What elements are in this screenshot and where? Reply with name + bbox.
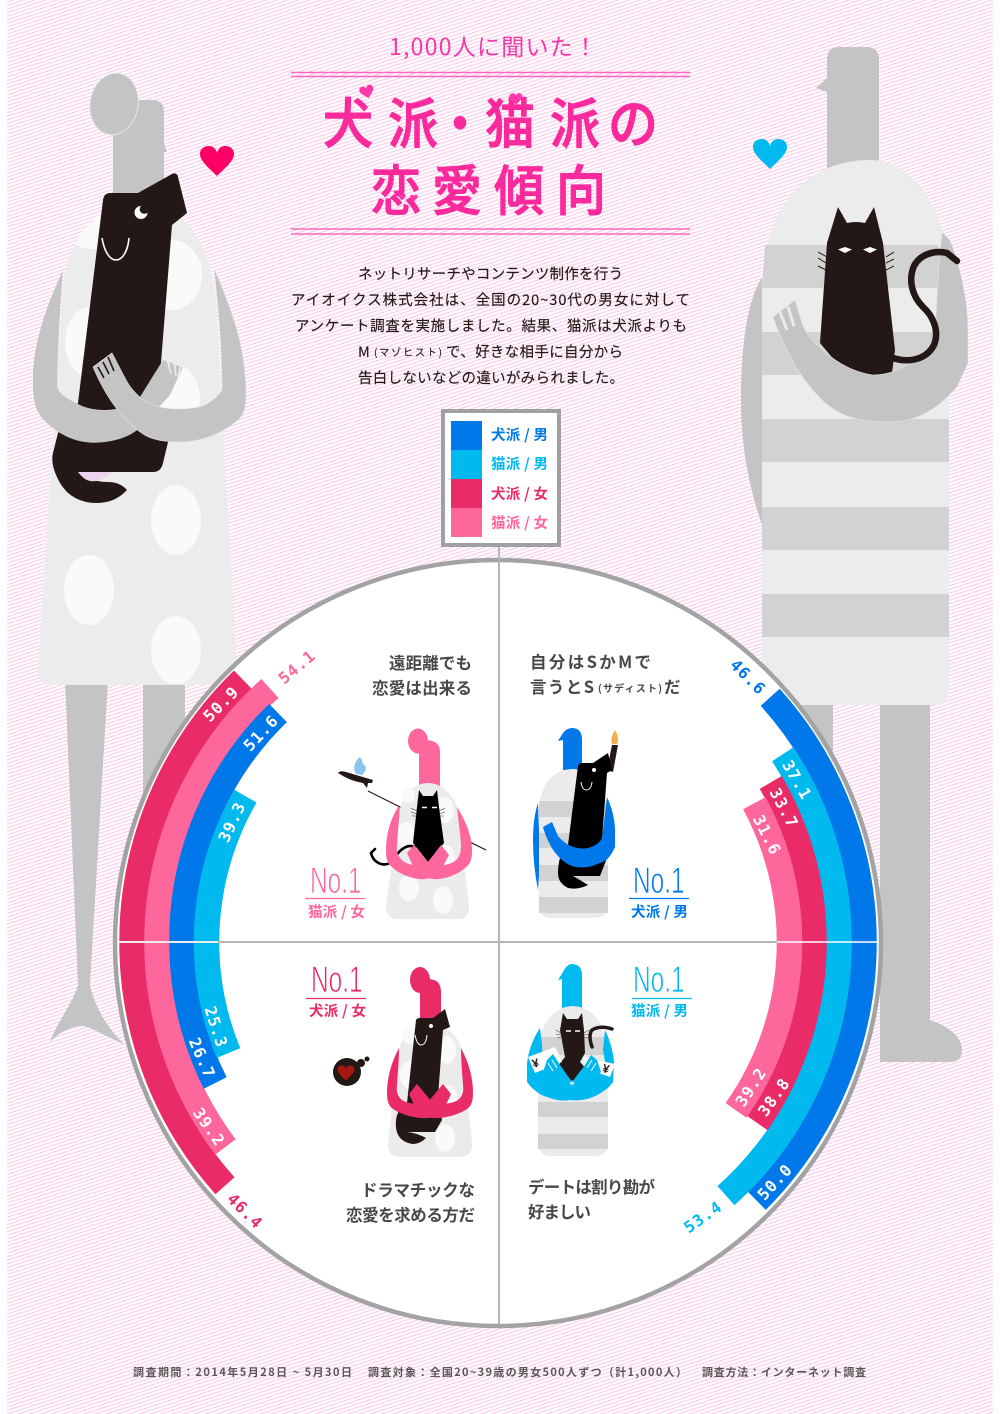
rank badge bbox=[305, 860, 365, 922]
heading bbox=[346, 1177, 475, 1226]
value labels: 46.4 bbox=[223, 1189, 267, 1233]
panel: dramatic love (bottom-left) bbox=[306, 959, 475, 1226]
intro text bbox=[291, 263, 690, 388]
value labels: 26.7 bbox=[185, 1035, 219, 1081]
subtitle: 1,000人に聞いた！ bbox=[389, 28, 597, 62]
rank badge: No.1 bbox=[310, 860, 362, 901]
hands bbox=[543, 1054, 601, 1086]
rank badge: No.1 bbox=[311, 959, 363, 1000]
rank badge bbox=[629, 860, 689, 922]
title rule bottom bbox=[291, 229, 690, 234]
icon: thought bubble heart bbox=[333, 1056, 370, 1086]
cat tail bbox=[893, 252, 957, 360]
dog eye bbox=[134, 206, 148, 219]
value labels: 38.8 bbox=[754, 1074, 794, 1120]
value labels: 53.4 bbox=[680, 1197, 726, 1237]
figure: man with cat bbox=[527, 964, 615, 1156]
rank badge: No.1 bbox=[633, 959, 685, 1000]
intro text: アイオイクス株式会社は、全国の20~30代の男女に対して bbox=[291, 289, 690, 310]
value labels: 39.3 bbox=[214, 799, 250, 845]
title: 恋愛傾向 bbox=[371, 162, 606, 222]
woman neck and hair bbox=[85, 69, 167, 215]
panel: S or M (top-right) bbox=[530, 649, 689, 922]
heading: (サディスト) bbox=[598, 680, 662, 695]
rank badge: 犬派 / 男 bbox=[631, 901, 688, 922]
woman dress with polka dots bbox=[38, 195, 237, 685]
heading: だ bbox=[664, 674, 680, 698]
illustration: woman with dog bbox=[33, 69, 246, 1045]
man neck and nose bbox=[816, 47, 879, 170]
intro text: 告白しないなどの違いがみられました。 bbox=[358, 367, 624, 388]
value labels: 51.6 bbox=[240, 711, 282, 755]
bill left bbox=[528, 1047, 562, 1073]
woman back arm bbox=[33, 270, 183, 443]
icon: airplane bbox=[338, 757, 373, 788]
heading: 恋愛は出来る bbox=[372, 675, 472, 699]
heading: デートは割り勘が bbox=[528, 1174, 656, 1198]
figure: man with dog bbox=[533, 728, 618, 918]
icon: pink heart bbox=[200, 146, 234, 176]
legend bbox=[443, 411, 559, 545]
rank badge: 猫派 / 男 bbox=[631, 1000, 688, 1021]
title: 犬派・猫派の bbox=[323, 95, 658, 155]
value labels: 46.6 bbox=[726, 655, 770, 699]
intro text: アンケート調査を実施しました。結果、猫派は犬派よりも bbox=[295, 315, 687, 336]
value labels: 31.6 bbox=[749, 812, 785, 858]
bill left: ¥ bbox=[531, 1056, 541, 1071]
main circle bbox=[115, 560, 881, 1326]
rank badge: 犬派 / 女 bbox=[309, 1000, 366, 1021]
title bbox=[323, 84, 658, 222]
rank badge: No.1 bbox=[633, 860, 685, 901]
legend label cat female: 猫派 / 女 bbox=[491, 512, 548, 533]
rank badge bbox=[631, 959, 692, 1021]
heading bbox=[528, 1174, 656, 1223]
cat whiskers bbox=[818, 252, 894, 270]
heading: 恋愛を求める方だ bbox=[346, 1202, 475, 1226]
footer note bbox=[133, 1364, 866, 1380]
dog body bbox=[52, 173, 187, 503]
heading bbox=[372, 650, 472, 699]
legend swatch cyan bbox=[451, 450, 482, 479]
legend label dog male: 犬派 / 男 bbox=[491, 424, 548, 445]
man front arm bbox=[773, 232, 968, 422]
title rule top bbox=[291, 72, 690, 76]
cat bbox=[818, 207, 895, 375]
panel: split the bill (bottom-right) bbox=[527, 959, 692, 1223]
chart: bottom-left arcs bbox=[132, 942, 228, 1186]
intro text: で、好きな相手に自分から bbox=[446, 341, 623, 362]
illustration: man with cat bbox=[741, 47, 968, 1062]
chart: top-left arcs bbox=[132, 680, 278, 942]
dog smile bbox=[102, 238, 129, 260]
value labels: 33.7 bbox=[766, 785, 802, 831]
value labels: 39.2 bbox=[189, 1104, 229, 1150]
value labels: 39.2 bbox=[731, 1064, 771, 1110]
icon: blue heart bbox=[753, 139, 787, 169]
title hearts bbox=[358, 84, 522, 201]
footer note: 調査対象：全国20~39歳の男女500人ずつ（計1,000人） bbox=[368, 1364, 687, 1380]
value labels: 25.3 bbox=[200, 1004, 232, 1050]
heading bbox=[530, 649, 680, 698]
intro text: (マゾヒスト) bbox=[374, 344, 442, 359]
value labels: 50.9 bbox=[199, 682, 243, 726]
value labels: 37.1 bbox=[778, 757, 816, 803]
heading: 遠距離でも bbox=[389, 650, 472, 674]
chart: top-right arcs bbox=[754, 697, 864, 942]
footer note: 調査期間：2014年5月28日 ~ 5月30日 bbox=[133, 1364, 352, 1380]
legend swatch blue bbox=[451, 421, 482, 450]
legend label cat male: 猫派 / 男 bbox=[491, 453, 548, 474]
rank badge: 猫派 / 女 bbox=[308, 901, 365, 922]
pink gap under tail bbox=[78, 472, 112, 481]
chart: bottom-right arcs bbox=[726, 942, 864, 1201]
heading: 自分はSかMで bbox=[530, 649, 651, 673]
value labels: 50.0 bbox=[754, 1160, 796, 1204]
legend label dog female: 犬派 / 女 bbox=[491, 483, 548, 504]
heading: 好ましい bbox=[528, 1199, 591, 1223]
value labels: 54.1 bbox=[275, 646, 319, 688]
cross dividers bbox=[117, 547, 878, 1325]
cat eyes bbox=[838, 247, 877, 253]
rank badge bbox=[306, 959, 366, 1021]
man striped shirt bbox=[762, 160, 949, 705]
intro text: M bbox=[358, 341, 370, 362]
footer note: 調査方法：インターネット調査 bbox=[702, 1364, 866, 1380]
bill right: ¥ bbox=[601, 1061, 611, 1077]
figure: woman with dog bbox=[387, 967, 473, 1157]
legend swatch pink bbox=[451, 508, 482, 537]
value labels bbox=[185, 646, 816, 1237]
heading: 言うとS bbox=[530, 674, 594, 698]
legend swatch dark pink bbox=[451, 479, 482, 508]
heading: ドラマチックな bbox=[361, 1177, 475, 1201]
intro text: ネットリサーチやコンテンツ制作を行う bbox=[358, 263, 623, 284]
panel: long distance (top-left) bbox=[305, 650, 486, 922]
woman legs bbox=[50, 680, 185, 1045]
man back arm bbox=[741, 277, 762, 525]
bill right bbox=[583, 1057, 615, 1077]
figure: woman with cat bbox=[371, 728, 472, 919]
man legs bbox=[790, 700, 962, 1062]
flight line bbox=[368, 791, 486, 850]
woman front arm bbox=[93, 268, 246, 442]
